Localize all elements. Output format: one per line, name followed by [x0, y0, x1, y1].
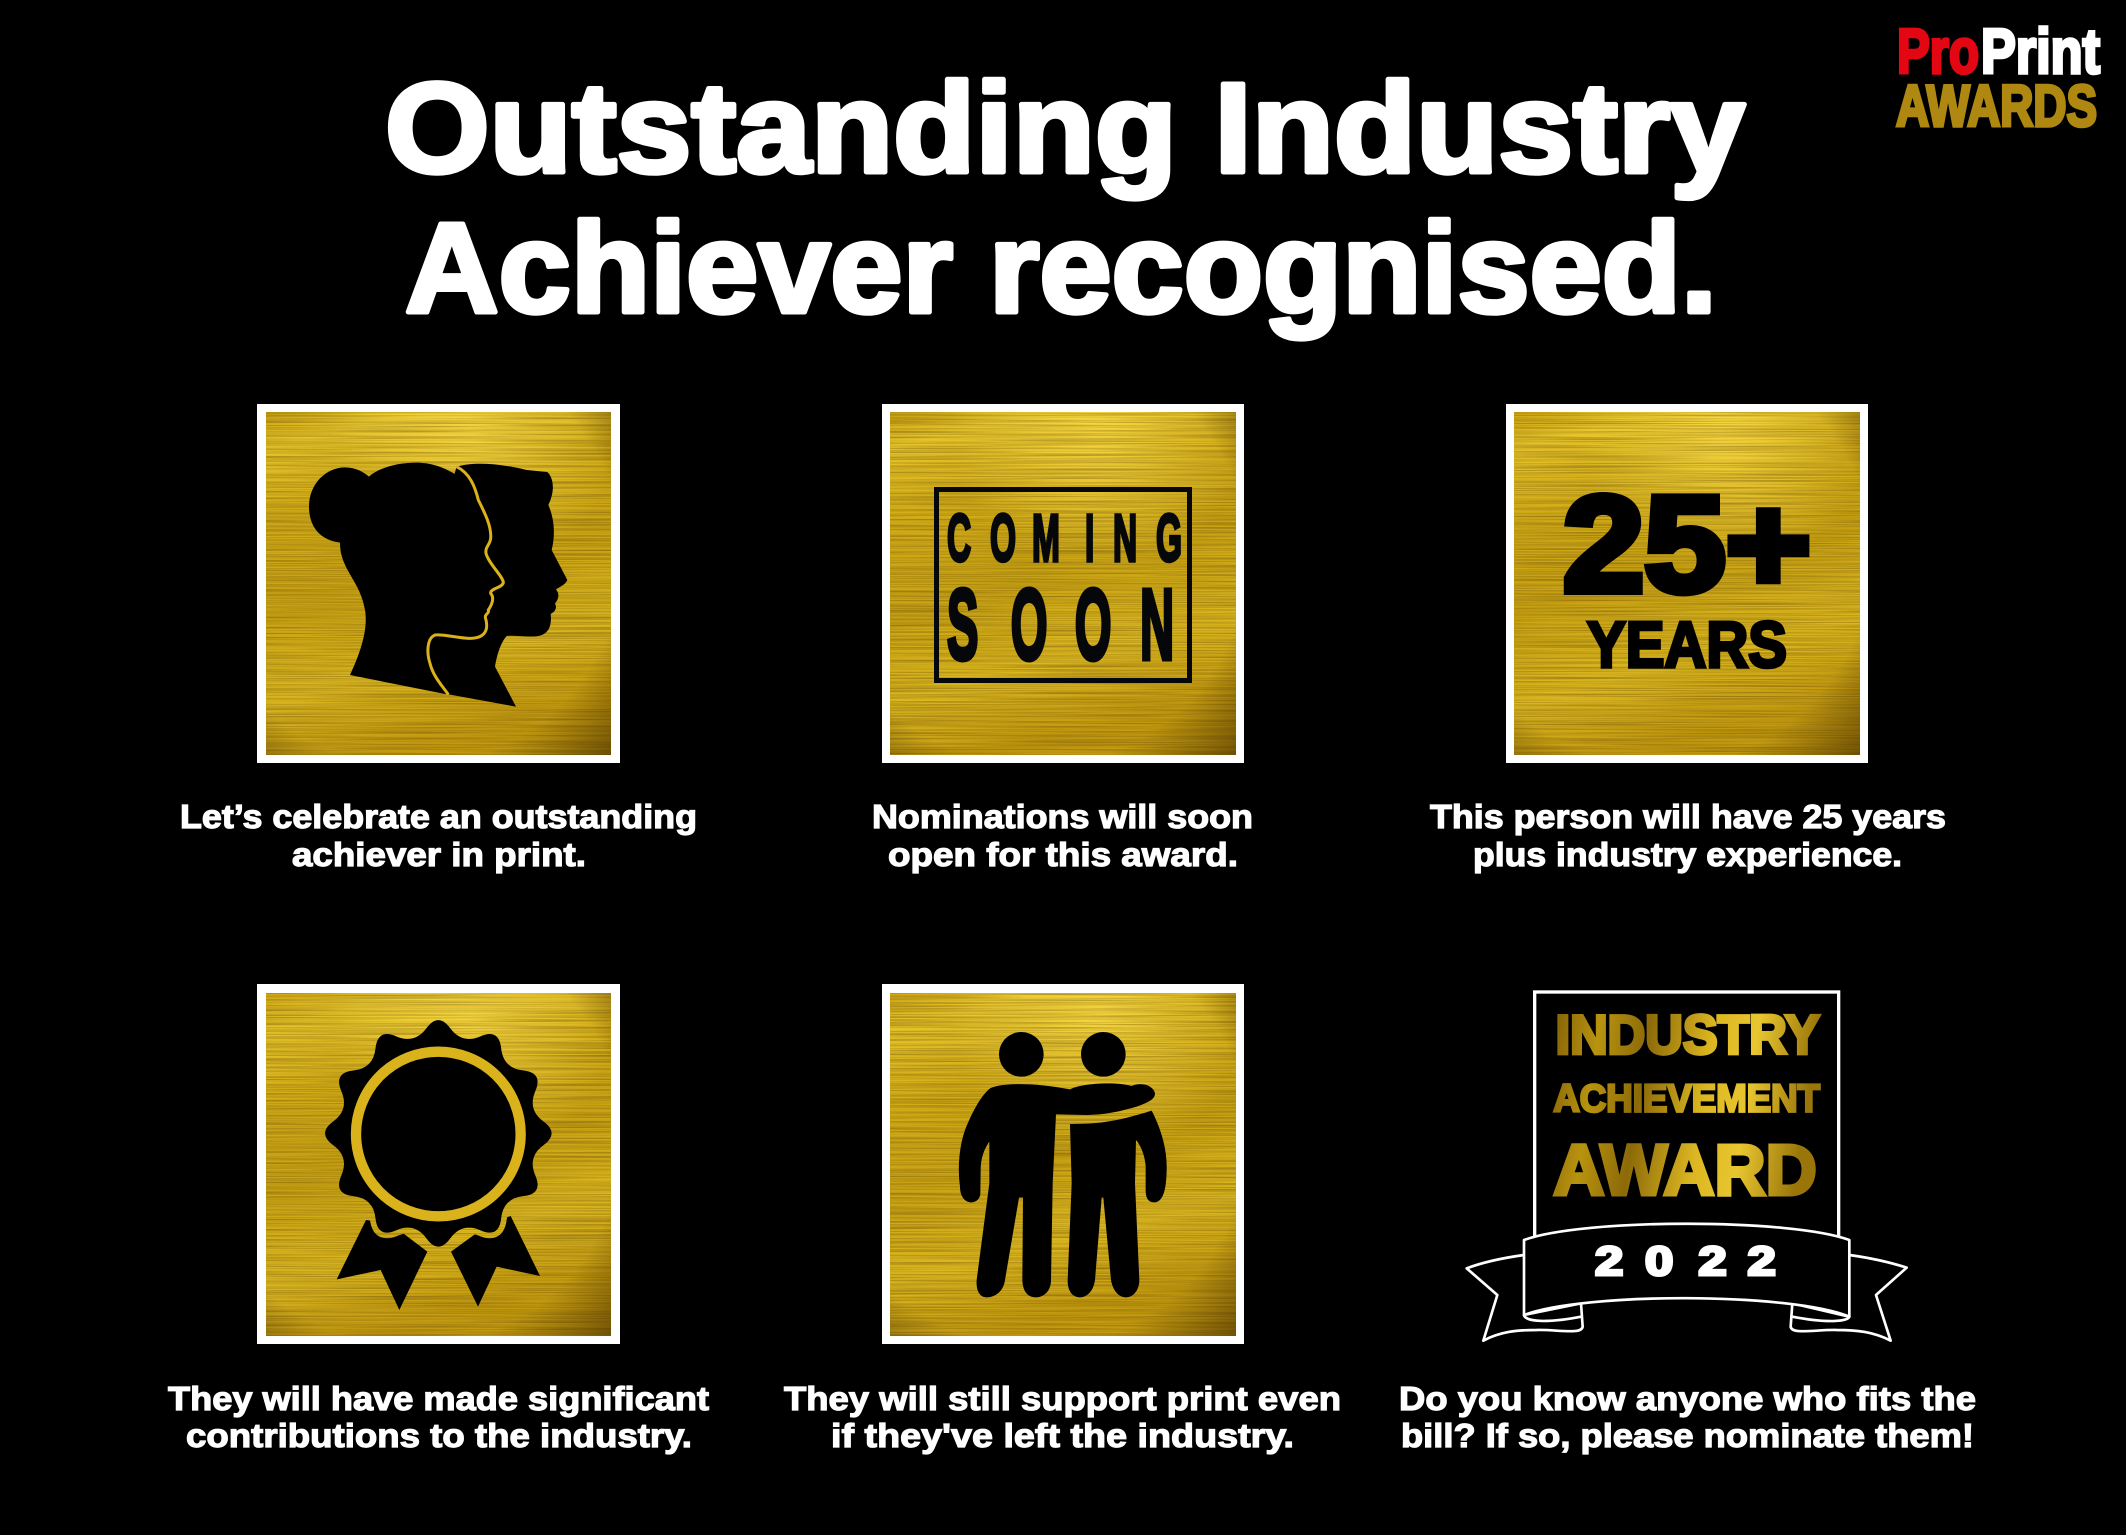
- panel: two friends: [882, 984, 1244, 1344]
- caption: nominations: open for this award.: [888, 836, 1238, 873]
- title: [385, 57, 1745, 340]
- text: INDUSTRY: INDUSTRY: [1556, 1003, 1820, 1065]
- text: AWARD: AWARD: [1553, 1131, 1817, 1211]
- caption: nominate: bill? If so, please nominate them!: [1401, 1417, 1974, 1454]
- caption: significant contributions: contributions to the industry.: [186, 1417, 692, 1454]
- caption: significant contributions: They will have made significant: [168, 1380, 709, 1417]
- caption: significant contributions: [168, 1380, 709, 1454]
- caption: outstanding achiever: [180, 798, 697, 873]
- caption: nominations: [872, 798, 1253, 873]
- caption: nominate: [1399, 1380, 1976, 1454]
- logo: ProPrint Awards: Print: [1981, 17, 2100, 87]
- caption: nominations: Nominations will soon: [872, 798, 1253, 835]
- text: ACHIEVEMENT: ACHIEVEMENT: [1553, 1076, 1820, 1120]
- panel: rosette: [257, 984, 620, 1344]
- title: Outstanding Industry: [385, 57, 1745, 200]
- caption: support print: [784, 1380, 1341, 1454]
- title: Achiever recognised.: [405, 197, 1717, 340]
- text: 2022: 2022: [1595, 1238, 1776, 1284]
- icon: two people embracing: [959, 1032, 1167, 1297]
- text: COMING: COMING: [947, 502, 1182, 576]
- ribbon tails: [1467, 1255, 1907, 1341]
- badge frame: [1535, 992, 1839, 1239]
- logo: ProPrint Awards: [1896, 17, 2100, 139]
- text: 25+: 25+: [1563, 468, 1811, 620]
- caption: 25 years experience: [1430, 798, 1946, 873]
- panel: profile silhouettes: [257, 404, 620, 763]
- caption: 25 years experience: This person will have 25 years: [1430, 798, 1946, 835]
- icon: coming soon frame: [936, 490, 1190, 680]
- icon: two head profiles: [309, 463, 567, 707]
- logo: ProPrint Awards: Pro: [1897, 17, 1979, 87]
- ribbon banner: [1524, 1224, 1849, 1317]
- caption: support print: They will still support print even: [784, 1380, 1341, 1417]
- panel: coming soon: [882, 404, 1244, 763]
- panel: award badge: [1467, 992, 1907, 1341]
- caption: nominate: Do you know anyone who fits the: [1399, 1380, 1976, 1417]
- caption: 25 years experience: plus industry experience.: [1473, 836, 1902, 873]
- text: YEARS: YEARS: [1587, 608, 1787, 681]
- icon: award rosette: [325, 1020, 552, 1310]
- caption: outstanding achiever: Let’s celebrate an outstanding: [180, 798, 697, 835]
- caption: support print: if they've left the industry.: [831, 1417, 1294, 1454]
- caption: outstanding achiever: achiever in print.: [292, 836, 586, 873]
- panel: 25+ years: [1506, 404, 1868, 763]
- text: SOON: SOON: [947, 568, 1174, 681]
